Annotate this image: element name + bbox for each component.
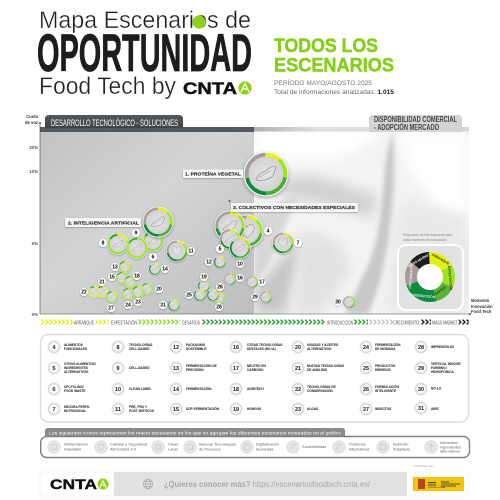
bubble 14: 14	[162, 267, 168, 273]
column 6: 24	[363, 345, 369, 351]
bubble 12: 12	[206, 260, 212, 266]
column 7	[414, 340, 461, 415]
bubble 13: 13	[112, 265, 118, 271]
column 3: SOSTENIBLE	[186, 347, 206, 351]
bubble 25: 25	[186, 293, 192, 299]
bubble 16	[224, 273, 244, 285]
column 5: 23	[295, 407, 301, 413]
funder logo	[413, 477, 464, 491]
column 5: 21	[295, 366, 301, 372]
arrow band: innovation stages: INTRODUCCIÓN	[327, 319, 353, 326]
panel: macro scenario icons: Calidad y Seguridad	[110, 442, 147, 446]
column 3: 14	[173, 387, 179, 393]
bubble 31	[159, 299, 180, 311]
column 7: VERTICAL INDOOR	[431, 362, 461, 366]
panel: macro scenario icons: Alimentación	[64, 442, 88, 446]
panel: macro scenario icons: Saludable	[64, 446, 81, 452]
column 3: 13	[173, 366, 179, 372]
donut legend: DESAFÍOS	[430, 284, 447, 299]
column 6: 25	[363, 366, 369, 372]
column 3: 12	[173, 345, 179, 351]
column 1: 7	[52, 407, 56, 413]
bubble 4: 4	[267, 229, 270, 235]
bubble 30: 30	[335, 300, 341, 306]
column 2: PRE, PRO Y	[129, 405, 148, 409]
bubble 23	[132, 286, 144, 306]
column 7: 30	[418, 387, 424, 393]
column 5: 22	[295, 387, 301, 393]
title: OPORTUNIDAD	[37, 24, 252, 83]
panel: macro scenario icons: Clean	[168, 442, 178, 446]
column 5: 20	[295, 345, 301, 351]
panel tab: disponibilidad comercial: - ADOPCIÓN MERCADO	[374, 123, 439, 132]
donut legend: MASS MARKET	[408, 252, 432, 268]
bubble 20: 20	[156, 287, 162, 293]
panel: macro scenario icons: de Procesos	[199, 446, 221, 452]
bubble 9	[126, 229, 148, 259]
column 7: AIRE	[431, 407, 439, 411]
bubble 17: 17	[259, 280, 265, 286]
donut legend: cada momento de innovación.	[403, 238, 447, 242]
donut legend: EXPECTACIÓN	[447, 266, 454, 291]
column 6: INSECTOS	[375, 407, 391, 411]
column 3: PRECISIÓN	[186, 367, 204, 372]
panel: macro scenario icons: Avanzada	[256, 446, 274, 452]
bubble 27	[106, 291, 118, 312]
bubble 2: inteligencia artificial	[65, 206, 174, 238]
heading: todos los escenarios: TODOS LOS	[274, 36, 378, 57]
panel: macro scenario icons: Nuevas Tecnologías	[199, 442, 236, 446]
column 2: TECNOLOGÍAS	[129, 342, 152, 347]
column 4: 16	[233, 345, 239, 351]
chart background	[40, 128, 469, 314]
panel: macro scenario icons: Alternativas	[349, 446, 369, 452]
bubble 25	[185, 289, 206, 301]
column 1: OTROS ALIMENTOS/	[64, 362, 96, 366]
bubble 26	[207, 283, 224, 301]
column 1: 5	[52, 366, 56, 372]
column 2: POST BIÓTICOS	[129, 408, 154, 413]
y axis labels	[25, 114, 41, 317]
title: CNTA	[183, 79, 237, 98]
y axis labels: 10%	[29, 169, 38, 174]
icon: CNTA footer logo	[98, 478, 108, 490]
bubble 3: colectivos	[214, 200, 358, 242]
column 7: 31	[418, 406, 424, 412]
footer banner: ¿Quieres conocer más? https://escenariosfoodtech.cnta.es/	[164, 480, 371, 489]
column 2: CELL-BASED	[129, 366, 150, 370]
panel: macro scenario icons: ingredientes	[440, 444, 461, 449]
column 7: IMPRESIÓN 3D	[431, 344, 455, 349]
column 1: FOOD WASTE	[64, 389, 85, 393]
panel: macro scenario icons: Digitalización	[256, 442, 279, 446]
column 7: FARMING/	[431, 366, 447, 370]
donut legend: INTRODUCCIÓN	[409, 292, 436, 299]
column 6: INTELIGENTE	[375, 389, 396, 393]
title accent dot	[192, 15, 206, 29]
column 5: ALTERNATIVOS	[307, 347, 331, 351]
column 2: 9	[116, 366, 120, 372]
panel: macro scenario icons	[41, 436, 469, 458]
column 2	[111, 340, 154, 416]
x axis label: momento innovación: Momento	[471, 298, 490, 303]
column 6	[359, 340, 401, 416]
column 5: NUEVAS TECNOLOGÍAS	[307, 363, 344, 368]
column 6: FERMENTACIÓN	[375, 342, 401, 347]
bubble 16: 16	[237, 276, 243, 282]
column 5	[291, 340, 344, 416]
column 3: 15	[173, 407, 179, 413]
y axis labels: de voz	[25, 120, 38, 125]
column 5: GRASAS Y ACEITES	[307, 343, 338, 347]
macro scenarios tab: Los siguientes iconos representan los macro escenarios en los que se agrupan los diferentes escenarios mostrados en el gráfico	[49, 430, 342, 436]
column 4: CARBONO	[247, 368, 264, 372]
arrow band: innovation stages: MASS MARKET	[432, 320, 458, 326]
column 1: ALTERNATIVOS	[64, 370, 88, 374]
column 4: 17	[233, 366, 239, 372]
bubble 7: 7	[297, 241, 300, 247]
funder caption: Financiado por:	[414, 464, 434, 468]
column 1: ALIMENTOS	[64, 343, 83, 347]
bubble 14	[149, 263, 169, 275]
bubble 7	[272, 232, 302, 254]
column 6: DE BIOMASA	[375, 347, 396, 351]
column 4: HONGOS	[247, 407, 261, 411]
bubble 29: 29	[252, 295, 258, 301]
column 6: PRODUCTOS	[375, 364, 395, 368]
column 7: 29	[418, 366, 424, 372]
column 5: TECNOLOGÍAS DE	[307, 384, 336, 389]
bubble 28: 28	[216, 305, 222, 311]
column 4: 19	[233, 407, 239, 413]
bubble 21	[96, 278, 108, 298]
bubble 10: 10	[237, 262, 243, 268]
column 2: 11	[115, 407, 121, 413]
axis lines	[40, 123, 471, 315]
bubble 11: 11	[188, 249, 194, 255]
bubble 3: colectivos: 3. COLECTIVOS CON NECESIDADES ESPECIALES	[233, 205, 355, 210]
panel: macro scenario icons: alternativos	[440, 448, 460, 454]
bubble 10	[229, 237, 251, 268]
bubble 17	[246, 276, 266, 288]
column 3: FERMENTACIÓN DE	[186, 363, 217, 368]
column 7: NO-LO	[431, 386, 442, 390]
column 4: 18	[233, 387, 239, 393]
panel: macro scenario icons: Alimentaria 4.0	[110, 446, 137, 452]
panel tab: desarrollo tecnológico	[45, 115, 183, 128]
bubble 15: 15	[109, 275, 115, 281]
x axis label: momento innovación: Innovación	[471, 304, 493, 309]
column 4: NEUTRO EN	[247, 364, 266, 368]
title: Food Tech by	[39, 73, 177, 100]
footer banner: CNTA	[50, 476, 97, 492]
column 1: 4	[52, 345, 56, 351]
arrow band: innovation stages: CRECIMIENTO	[393, 320, 419, 326]
column 4	[229, 340, 282, 416]
column 1: MEJORA PERFIL	[64, 405, 90, 409]
y axis labels: 5%	[32, 241, 38, 246]
footer banner	[40, 472, 468, 496]
title	[37, 7, 252, 100]
bubble 24: 24	[125, 303, 131, 309]
bubble 2: inteligencia artificial: 2. INTELIGENCIA ARTIFICIAL	[68, 220, 139, 225]
bubble 12	[205, 256, 226, 268]
column 1: NUTRICIONAL	[64, 409, 86, 413]
bubble 9: 9	[135, 231, 138, 237]
heading: todos los escenarios: ESCENARIOS	[274, 56, 394, 76]
icon: globe	[143, 479, 153, 489]
column 3: PACKAGING	[186, 343, 206, 347]
column 1: FUNCIONALES	[64, 347, 87, 351]
y axis labels: 20%	[29, 145, 38, 150]
bubble 8	[99, 233, 129, 255]
panel: macro scenario icons: Sostenibilidad	[302, 444, 326, 449]
donut legend: CRECIMIENTO	[408, 265, 414, 289]
icon: CNTA logo	[238, 81, 252, 95]
bubble 22	[80, 286, 100, 298]
bubble 27: 27	[108, 306, 114, 312]
column 6: HÍBRIDOS	[375, 367, 391, 372]
column 5: CONSERVACIÓN	[307, 388, 333, 393]
heading: todos los escenarios	[274, 36, 395, 96]
bubble 29	[251, 291, 272, 303]
panel tab: desarrollo tecnológico: DESARROLLO TECNOLÓGICO - SOLUCIONES	[51, 118, 178, 128]
bubbles small	[80, 214, 355, 312]
column 2: 10	[115, 387, 121, 393]
column 3: SCP-FERMENTACIÓN	[186, 406, 220, 411]
arrow band: innovation stages: EXPECTACIÓN	[111, 319, 137, 326]
column 1: 6	[52, 387, 56, 393]
panel: scenario list	[40, 334, 468, 422]
column 4: AGRITECH	[247, 387, 264, 391]
panel: macro scenario icons: Nutrición	[393, 442, 408, 446]
column 2: CLEAN LABEL	[129, 387, 152, 391]
bubble 18	[124, 272, 141, 288]
bubble 4	[230, 214, 272, 248]
donut legend	[398, 233, 463, 310]
column 6: 27	[363, 407, 369, 413]
panel: macro scenario icons: Adaptada	[393, 446, 410, 452]
bubble 21: 21	[99, 280, 105, 286]
bubble 31: 31	[160, 303, 166, 309]
panel tab: disponibilidad comercial: DISPONIBILIDAD COMERCIAL	[374, 115, 457, 124]
column 5: DE ANÁLISIS	[307, 367, 327, 372]
bubble 1: proteína vegetal	[183, 152, 288, 196]
arrow band: innovation stages	[41, 319, 469, 326]
y axis labels: 0%	[32, 312, 38, 317]
column 4: DIGITALES (NO IA)	[247, 347, 276, 351]
column 1: UPCYCLING/	[64, 385, 84, 389]
bubble 28	[213, 292, 225, 311]
column 6: FORMULACIÓN	[375, 384, 400, 389]
funder logo: GOBIERNO DE ESPAÑA	[428, 486, 445, 489]
bubble 5	[216, 228, 240, 253]
panel: macro scenario icons: Alimentos/	[440, 440, 459, 445]
column 2: CELL-BASED	[129, 347, 150, 351]
bubble 6: 6	[152, 255, 155, 261]
bubble 13	[111, 261, 131, 273]
y axis labels: Cuota	[26, 114, 39, 119]
column 2: 8	[116, 345, 120, 351]
bubble 26: 26	[217, 285, 223, 291]
donut legend: Proporción de informaciones para	[403, 233, 453, 237]
bubble 11	[166, 240, 195, 262]
bubble 19: 19	[201, 275, 207, 281]
title: Mapa Escenarios de	[39, 7, 251, 34]
heading: todos los escenarios: PERÍODO MAYO/AGOSTO 2025	[274, 80, 373, 87]
bubble 6	[142, 230, 164, 261]
bubble 30	[334, 296, 355, 308]
bubble 8: 8	[102, 241, 105, 247]
x axis label: momento innovación	[471, 298, 493, 314]
bubble 20	[141, 283, 163, 295]
macro scenarios tab	[45, 428, 345, 437]
panel: macro scenario icons: Label	[168, 446, 178, 452]
panel tab: disponibilidad comercial	[369, 115, 462, 132]
bubble 1: proteína vegetal: 1. PROTEÍNA VEGETAL	[185, 170, 241, 176]
bubble 23: 23	[135, 300, 141, 306]
bubble 18: 18	[134, 274, 140, 280]
bubble 19	[198, 273, 210, 292]
donut legend: ARRANQUE	[431, 253, 451, 266]
panel: macro scenario icons: Proteínas	[349, 442, 366, 446]
column 6: 26	[363, 387, 369, 393]
arrow band: innovation stages: ARRANQUE	[74, 320, 94, 326]
column 1	[47, 340, 96, 416]
column 3	[169, 340, 220, 416]
x axis label: momento innovación: Food Tech	[471, 309, 492, 314]
column 7: 28	[418, 345, 424, 351]
column 7: HIDROPÓNICA	[431, 369, 454, 374]
bubble 24	[122, 288, 134, 309]
heading: todos los escenarios: Total de informaciones analizadas: 1.015	[274, 90, 395, 96]
bubble 22: 22	[81, 290, 87, 296]
bubble 5: 5	[219, 247, 222, 253]
column 3: FERMENTACIÓN	[186, 386, 212, 391]
column 4: OTRAS TECNOLOGÍAS	[247, 342, 282, 347]
arrow band: innovation stages: DESAFÍOS	[182, 319, 200, 326]
column 1: INGREDIENTES	[64, 366, 88, 370]
bubble 15	[108, 272, 128, 284]
column 5: ALGAS	[307, 407, 318, 411]
